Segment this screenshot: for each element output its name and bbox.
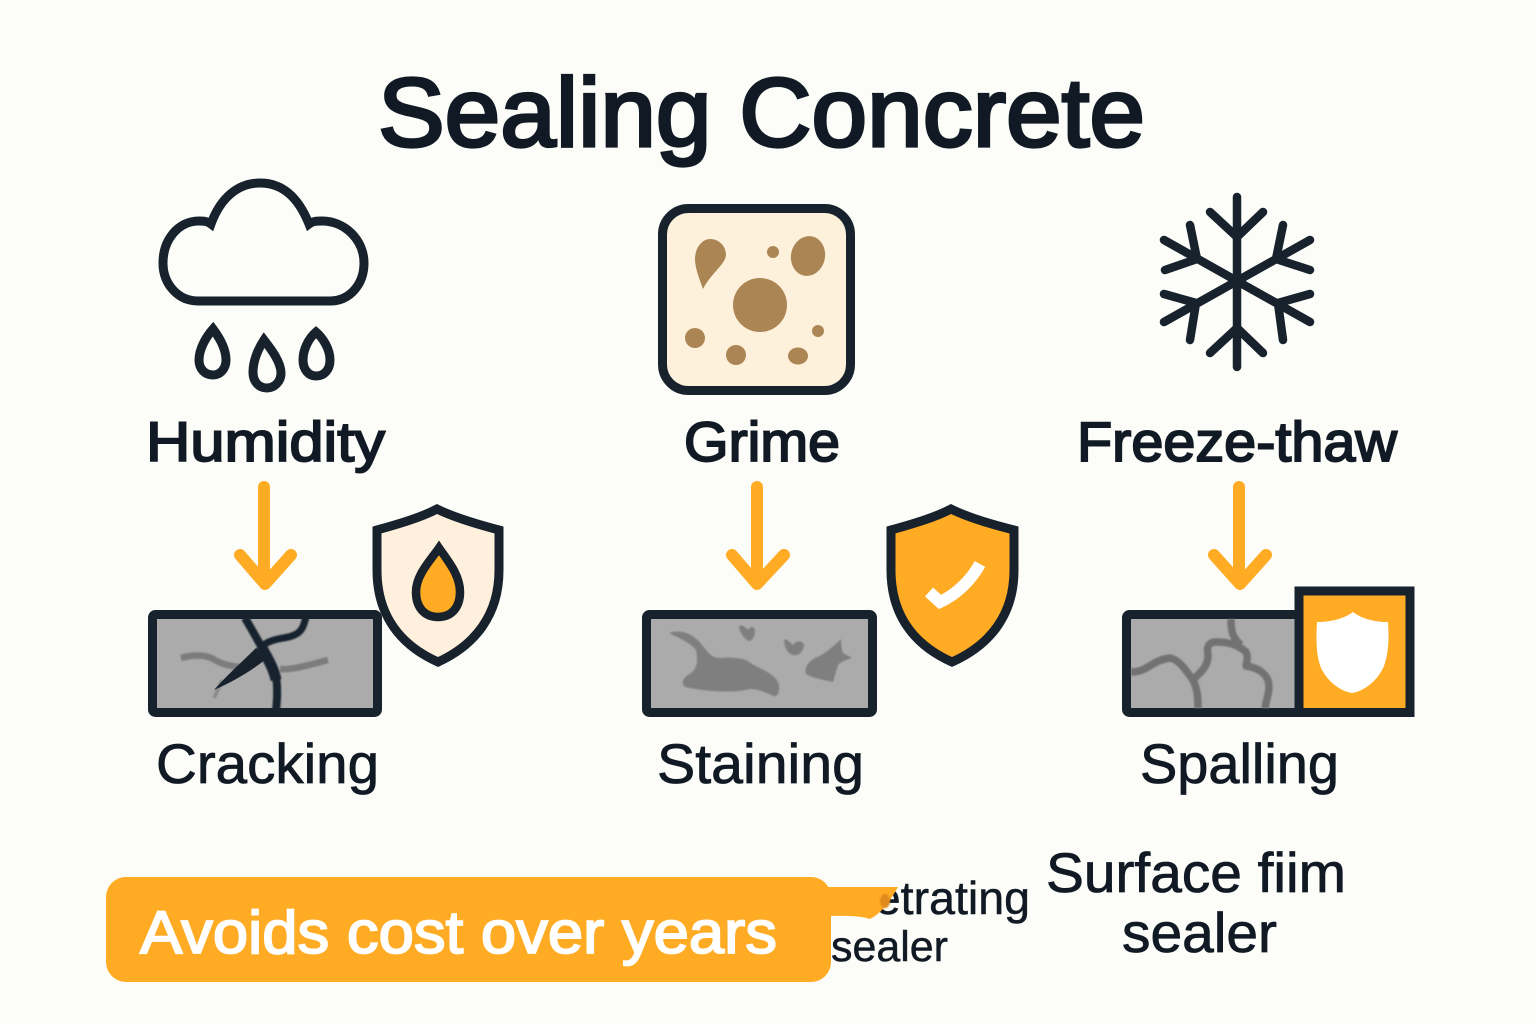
label: Humidity: Humidity xyxy=(146,410,385,473)
column: grime xyxy=(646,208,1014,795)
arrow: humidity to cracking xyxy=(240,487,291,584)
arrow: freeze-thaw to spalling xyxy=(1214,487,1266,584)
icon: shield with check xyxy=(891,509,1014,662)
concrete block: staining xyxy=(646,614,872,712)
label: Penetrating sealer xyxy=(792,872,1030,971)
label: Cracking: Cracking xyxy=(156,732,379,795)
icon: shield with drop xyxy=(377,509,499,662)
concrete block: cracking xyxy=(152,614,378,712)
arrow: grime to staining xyxy=(732,487,784,584)
label: Surface film sealer: sealer xyxy=(1122,901,1277,964)
callout: avoids cost over years: Avoids cost over years xyxy=(140,899,777,966)
icon: rain cloud xyxy=(163,183,364,388)
label: Freeze-thaw: Freeze-thaw xyxy=(1077,410,1398,473)
column: humidity xyxy=(146,183,499,795)
label: Staining: Staining xyxy=(657,732,864,795)
icon: snowflake xyxy=(1164,197,1310,367)
title: Sealing Concrete xyxy=(378,58,1145,167)
label: Spalling: Spalling xyxy=(1140,732,1339,795)
label: Penetrating sealer: sealer xyxy=(831,923,948,971)
label: Grime: Grime xyxy=(684,410,840,473)
label: Surface film sealer xyxy=(1046,841,1346,964)
icon: grime square xyxy=(662,208,850,390)
label: Penetrating sealer: Penetrating xyxy=(792,872,1030,924)
concrete block: spalling with shield panel xyxy=(1126,591,1410,712)
column: freeze-thaw xyxy=(1077,197,1410,795)
label: Surface film sealer: Surface fiim xyxy=(1046,841,1346,904)
callout: avoids cost over years xyxy=(106,877,898,982)
